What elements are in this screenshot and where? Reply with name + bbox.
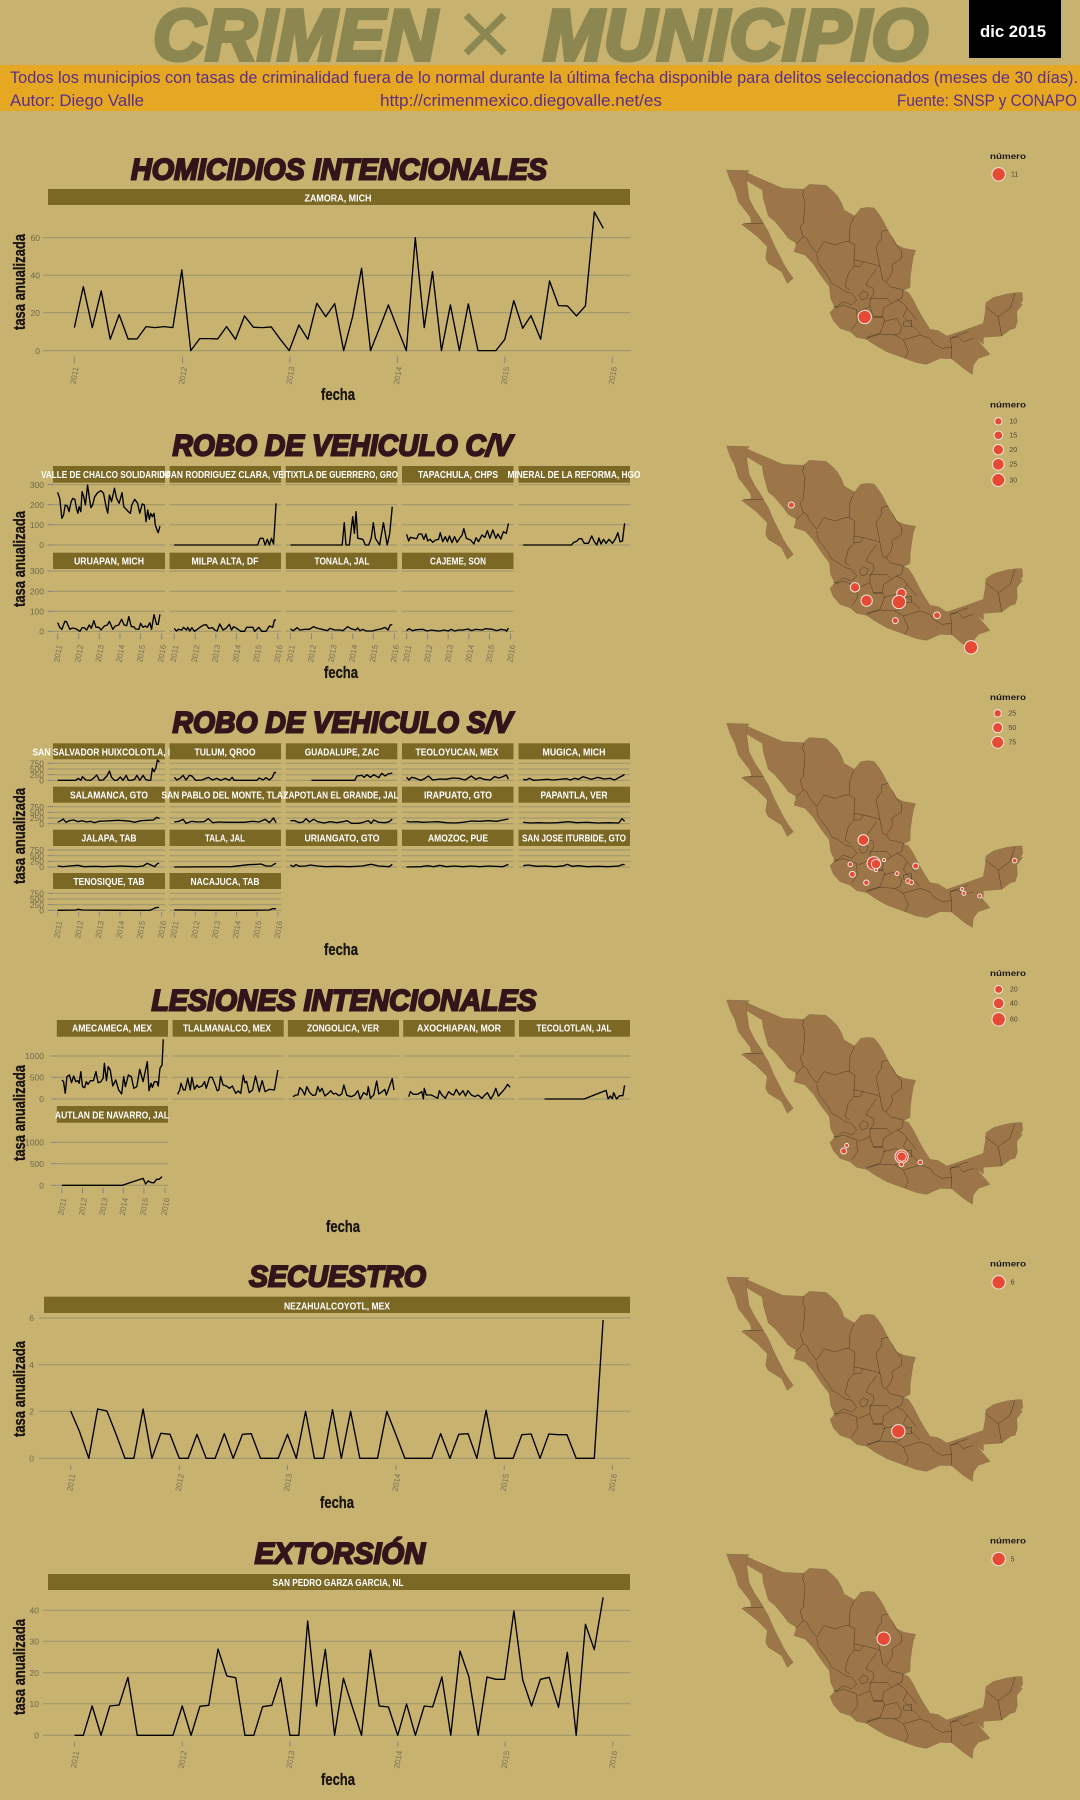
facet: Amozoc (402, 830, 514, 867)
y axis labels: 0 (39, 540, 44, 550)
facet: Teoloyucan: TEOLOYUCAN, MEX (416, 748, 499, 758)
facet: Tixtla de Guerrero (286, 466, 398, 545)
facet: Autlan de Navarro (55, 1106, 169, 1185)
y axis labels: 0 (39, 819, 44, 829)
facet: Autlan de Navarro: AUTLAN DE NAVARRO, JAL (55, 1110, 169, 1122)
y axis labels: 500 (30, 764, 44, 774)
facet: Zapotlan el Grande (284, 787, 398, 823)
y axis labels: 750 (30, 758, 44, 768)
x axis labels: 2016 (505, 643, 517, 663)
map: extorsion: 5 (1011, 1556, 1015, 1563)
axes and grid (48, 485, 630, 639)
facet: Cajeme: CAJEME, SON (430, 556, 486, 568)
x axis title: fecha (326, 1217, 360, 1236)
x axis labels: 2011 (69, 366, 81, 385)
subtitle banner: Autor: Diego Valle (10, 91, 144, 110)
y axis labels: 750 (30, 845, 44, 855)
y axis labels: 10 (30, 1699, 39, 1709)
facet: Irapuato (402, 787, 514, 823)
map: robo s/v (727, 692, 1026, 928)
facet: Nacajuca: NACAJUCA, TAB (190, 877, 260, 888)
facet: Irapuato: IRAPUATO, GTO (424, 790, 492, 802)
x axis labels: 2012 (73, 919, 85, 939)
y axis labels: 0 (39, 906, 44, 916)
y axis labels (30, 758, 44, 916)
y axis labels: 0 (39, 1180, 44, 1190)
map: robo s/v: 50 (1008, 725, 1016, 732)
y axis labels: 1000 (25, 1051, 44, 1061)
map: extorsion (727, 1536, 1026, 1758)
facet: Papantla: PAPANTLA, VER (540, 790, 608, 802)
x axis labels (52, 643, 517, 663)
x axis labels: 2016 (389, 643, 401, 663)
facet: Tecolotlan (519, 1020, 630, 1099)
x axis labels: 2014 (115, 919, 127, 939)
y axis labels (30, 1606, 39, 1740)
map: robo c/v: 20 (1009, 447, 1017, 454)
x axis labels: 2012 (306, 643, 318, 663)
y axis labels: 300 (30, 566, 44, 576)
y axis labels: 4 (29, 1360, 34, 1370)
facet: Jalapa (53, 830, 165, 867)
facet: Tonala: TONALA, JAL (314, 556, 370, 568)
facet: Jalapa: JALAPA, TAB (82, 834, 136, 844)
y axis labels: 20 (30, 1668, 39, 1678)
y axis title: tasa anualizada (10, 1341, 29, 1437)
map: homicidios: número (990, 151, 1026, 161)
map: robo s/v: número (990, 692, 1026, 702)
facet: Guadalupe (286, 743, 397, 780)
y axis labels: 500 (30, 851, 44, 861)
x axis labels: 2015 (500, 1749, 512, 1769)
x axis labels: 2016 (160, 1196, 172, 1216)
facet: Mineral de la Reforma (508, 466, 641, 545)
x axis title: fecha (320, 1493, 354, 1512)
y axis labels (25, 1051, 44, 1190)
x axis labels: 2015 (138, 1196, 151, 1216)
x axis labels: 2016 (607, 365, 619, 385)
map: robo c/v: 10 (1009, 419, 1017, 426)
x axis labels: 2013 (327, 643, 339, 663)
map: secuestro: 6 (1011, 1280, 1015, 1287)
y axis labels: 100 (30, 606, 44, 616)
x axis labels: 2015 (484, 643, 496, 663)
x axis labels: 2015 (252, 643, 264, 663)
x axis labels (65, 1472, 619, 1492)
map: robo c/v: 30 (1009, 477, 1017, 484)
map: secuestro (727, 1259, 1026, 1481)
axes and grid (48, 763, 630, 917)
x axis labels: 2016 (156, 643, 168, 663)
x axis labels: 2013 (443, 643, 455, 663)
y axis labels: 750 (30, 888, 44, 898)
facet: Uriangato (286, 830, 397, 867)
facet: Papantla (518, 787, 630, 823)
facet: Tixtla de Guerrero: TIXTLA DE GUERRERO, GRO (286, 470, 398, 481)
x axis labels: 2013 (285, 365, 297, 385)
map: homicidios (727, 151, 1026, 374)
facet: Uruapan: URUAPAN, MICH (74, 556, 144, 568)
y axis labels: 500 (30, 808, 44, 818)
x axis labels (69, 1749, 619, 1769)
y axis labels: 0 (39, 862, 44, 872)
y axis labels: 750 (30, 802, 44, 812)
x axis labels: 2014 (347, 643, 359, 663)
facet: Teoloyucan (402, 743, 514, 780)
x axis labels: 2013 (94, 919, 106, 939)
y axis labels: 0 (39, 776, 44, 786)
y axis labels: 0 (35, 346, 40, 356)
facet: Tulum (170, 743, 281, 780)
map: lesiones (727, 968, 1026, 1204)
y axis labels: 0 (39, 626, 44, 636)
y axis labels: 250 (30, 856, 44, 866)
facet: Mugica: MUGICA, MICH (542, 748, 606, 758)
y axis labels (30, 480, 44, 636)
facet: San Pedro Garza Garcia: SAN PEDRO GARZA GARCIA, NL (272, 1578, 404, 1589)
facet: Guadalupe: GUADALUPE, ZAC (305, 748, 379, 758)
x axis labels: 2011 (285, 644, 297, 663)
facet: San Salvador Huixcolotla (32, 743, 186, 780)
x axis labels: 2014 (392, 1749, 404, 1769)
y axis labels: 0 (29, 1454, 34, 1464)
facet: Axochiapan (403, 1020, 515, 1099)
y axis labels: 6 (29, 1313, 34, 1323)
facet: Juan Rodriguez Clara (160, 466, 291, 545)
x axis labels (52, 919, 285, 939)
x axis labels: 2012 (77, 1196, 89, 1216)
x axis labels: 2011 (57, 1197, 68, 1216)
y axis labels: 300 (30, 480, 44, 490)
y axis labels: 500 (30, 1159, 44, 1169)
y axis labels: 1000 (25, 1138, 44, 1148)
facet: San Jose Iturbide (518, 830, 630, 867)
x axis title: fecha (324, 663, 358, 682)
axes and grid (43, 1610, 630, 1747)
x axis labels: 2012 (177, 1749, 189, 1769)
facet: Tenosique: TENOSIQUE, TAB (74, 877, 144, 888)
y axis labels (29, 1313, 34, 1464)
x axis labels: 2014 (391, 1472, 403, 1492)
subtitle banner (0, 65, 1080, 111)
y axis labels: 100 (30, 520, 44, 530)
x axis labels: 2016 (273, 643, 285, 663)
y axis labels: 40 (30, 1606, 39, 1616)
map: secuestro: número (990, 1259, 1026, 1269)
x axis labels (69, 365, 619, 385)
x axis labels: 2016 (273, 919, 285, 939)
x axis labels: 2013 (94, 643, 106, 663)
y axis labels: 200 (30, 586, 44, 596)
heading: robo s/v: ROBO DE VEHICULO S/V (172, 706, 515, 740)
x axis labels: 2015 (135, 919, 147, 939)
facet: San Pablo del Monte: SAN PABLO DEL MONTE, TLAX (162, 790, 289, 802)
facet: Nacajuca (170, 873, 281, 910)
y axis title: tasa anualizada (10, 1065, 29, 1161)
map: robo c/v: 15 (1009, 433, 1017, 440)
x axis labels: 2015 (252, 919, 264, 939)
facet: Tulum: TULUM, QROO (194, 748, 256, 758)
facet: Tala (170, 830, 281, 867)
x axis labels: 2015 (499, 365, 511, 385)
axes and grid (43, 238, 630, 363)
map: lesiones: 20 (1010, 987, 1018, 994)
x axis labels: 2013 (210, 643, 222, 663)
facet: San Salvador Huixcolotla: SAN SALVADOR HUIXCOLOTLA, PUE (32, 748, 186, 758)
facet: Amecameca: AMECAMECA, MEX (72, 1024, 152, 1034)
facet: Zapotlan el Grande: ZAPOTLAN EL GRANDE, JAL (284, 790, 398, 802)
facet: Milpa Alta (170, 553, 281, 631)
facet: Zongolica (288, 1020, 399, 1099)
x axis labels: 2011 (52, 920, 64, 939)
date badge: dic 2015 (980, 22, 1046, 41)
map: lesiones: 40 (1010, 1001, 1018, 1008)
x axis labels: 2015 (368, 643, 380, 663)
x axis labels: 2014 (392, 365, 404, 385)
facet: Valle de Chalco: VALLE DE CHALCO SOLIDARIDAD (41, 470, 177, 481)
heading: homicidios: HOMICIDIOS INTENCIONALES (131, 154, 547, 186)
y axis labels: 40 (31, 270, 40, 280)
panel: robo de vehiculo s/v chart (10, 706, 630, 959)
y axis title: tasa anualizada (10, 788, 29, 884)
x axis title: fecha (321, 1770, 355, 1789)
x axis labels: 2014 (231, 919, 243, 939)
x axis labels: 2013 (285, 1749, 297, 1769)
panel: lesiones intencionales chart (10, 984, 630, 1236)
x axis labels: 2012 (190, 643, 202, 663)
facet: Salamanca: SALAMANCA, GTO (70, 790, 148, 802)
facet: Salamanca (53, 787, 165, 823)
x axis labels: 2015 (499, 1472, 511, 1492)
title (153, 0, 928, 87)
heading: robo c/v: ROBO DE VEHICULO C/V (172, 430, 515, 462)
axes and grid (39, 1318, 630, 1470)
y axis labels: 250 (30, 770, 44, 780)
y axis labels (31, 233, 40, 356)
facet: Zamora (48, 189, 630, 351)
x axis labels: 2011 (169, 920, 181, 939)
facet: Tecolotlan: TECOLOTLAN, JAL (536, 1024, 612, 1034)
facet: Zamora: ZAMORA, MICH (304, 194, 372, 204)
facet: San Pedro Garza Garcia (48, 1574, 630, 1735)
facet: San Pablo del Monte (162, 787, 289, 823)
panel: secuestro chart (10, 1260, 630, 1512)
facet: Cajeme (402, 553, 514, 631)
facet: Axochiapan: AXOCHIAPAN, MOR (417, 1024, 502, 1034)
x axis labels: 2011 (402, 644, 413, 663)
panel: homicidios intencionales chart (10, 154, 630, 404)
y axis title: tasa anualizada (10, 1619, 29, 1715)
facet: Mineral de la Reforma: MINERAL DE LA REFORMA, HGO (508, 470, 641, 481)
map: robo c/v: número (990, 400, 1026, 410)
x axis labels: 2016 (156, 919, 168, 939)
x axis labels: 2012 (190, 919, 202, 939)
map: lesiones: número (990, 968, 1026, 978)
x axis labels: 2014 (118, 1196, 130, 1216)
facet: Amecameca (57, 1020, 168, 1094)
y axis labels: 20 (31, 308, 40, 318)
facet: Tenosique (53, 873, 165, 910)
x axis labels: 2014 (115, 643, 127, 663)
x axis labels: 2016 (607, 1749, 619, 1769)
x axis labels: 2015 (135, 643, 147, 663)
x axis labels: 2011 (69, 1750, 81, 1769)
heading: extorsion: EXTORSIÓN (255, 1536, 426, 1570)
facet: San Jose Iturbide: SAN JOSE ITURBIDE, GTO (522, 834, 626, 844)
y axis labels: 200 (30, 500, 44, 510)
x axis labels: 2013 (210, 919, 222, 939)
x axis labels: 2011 (52, 644, 64, 663)
facet: Nezahualcoyotl: NEZAHUALCOYOTL, MEX (284, 1302, 390, 1312)
map: extorsion: número (990, 1536, 1026, 1546)
facet: Tapachula (402, 466, 514, 544)
y axis labels: 500 (30, 1072, 44, 1082)
facet: Amozoc: AMOZOC, PUE (428, 834, 488, 844)
facet: Tala: TALA, JAL (205, 834, 245, 844)
facet: Tonala (286, 553, 397, 631)
y axis labels: 30 (30, 1636, 39, 1646)
facet: Milpa Alta: MILPA ALTA, DF (192, 556, 258, 568)
heading: lesiones: LESIONES INTENCIONALES (152, 984, 536, 1018)
map: robo s/v: 75 (1008, 740, 1016, 747)
x axis title: fecha (324, 940, 358, 959)
facet: Mugica (518, 743, 630, 780)
x axis title: fecha (321, 385, 355, 404)
map: robo c/v (727, 400, 1026, 654)
subtitle banner: http://crimenmexico.diegovalle.net/es (380, 91, 662, 110)
panel: robo de vehiculo c/v chart (10, 430, 641, 682)
y axis title: tasa anualizada (10, 234, 29, 330)
facet: Valle de Chalco (41, 466, 177, 533)
x axis labels: 2012 (177, 365, 189, 385)
x axis labels: 2014 (231, 643, 243, 663)
y axis labels: 250 (30, 900, 44, 910)
y axis title: tasa anualizada (10, 511, 29, 607)
panel: extorsion chart (10, 1536, 630, 1789)
x axis labels: 2013 (98, 1196, 110, 1216)
y axis labels: 0 (34, 1730, 39, 1740)
x axis labels: 2011 (169, 644, 181, 663)
axes and grid (51, 1056, 630, 1193)
x axis labels: 2014 (464, 643, 476, 663)
y axis labels: 500 (30, 894, 44, 904)
facet: Nezahualcoyotl (44, 1297, 630, 1458)
facet: Tapachula: TAPACHULA, CHPS (418, 470, 498, 481)
y axis labels: 0 (39, 1094, 44, 1104)
x axis labels: 2012 (73, 643, 85, 663)
x axis labels (57, 1196, 172, 1216)
map: robo s/v: 25 (1008, 711, 1016, 718)
y axis labels: 2 (29, 1406, 34, 1416)
facet: Zongolica: ZONGOLICA, VER (307, 1024, 380, 1034)
facet: Tlalmanalco: TLALMANALCO, MEX (183, 1024, 271, 1034)
x axis labels: 2013 (282, 1472, 294, 1492)
map: lesiones: 60 (1010, 1017, 1018, 1024)
facet: Uruapan (53, 553, 165, 631)
date badge (969, 0, 1061, 58)
facet: Uriangato: URIANGATO, GTO (304, 834, 380, 844)
x axis labels: 2012 (174, 1472, 186, 1492)
x axis labels: 2011 (65, 1473, 77, 1492)
map: robo c/v: 25 (1009, 462, 1017, 469)
facet: Tlalmanalco (173, 1020, 284, 1094)
x axis labels: 2012 (422, 643, 435, 663)
heading: secuestro: SECUESTRO (249, 1260, 426, 1294)
x axis labels: 2016 (607, 1472, 619, 1492)
map: homicidios: 11 (1011, 172, 1018, 179)
y axis labels: 250 (30, 813, 44, 823)
y axis labels: 60 (31, 233, 40, 243)
facet: Juan Rodriguez Clara: JUAN RODRIGUEZ CLARA, VER (160, 470, 291, 481)
